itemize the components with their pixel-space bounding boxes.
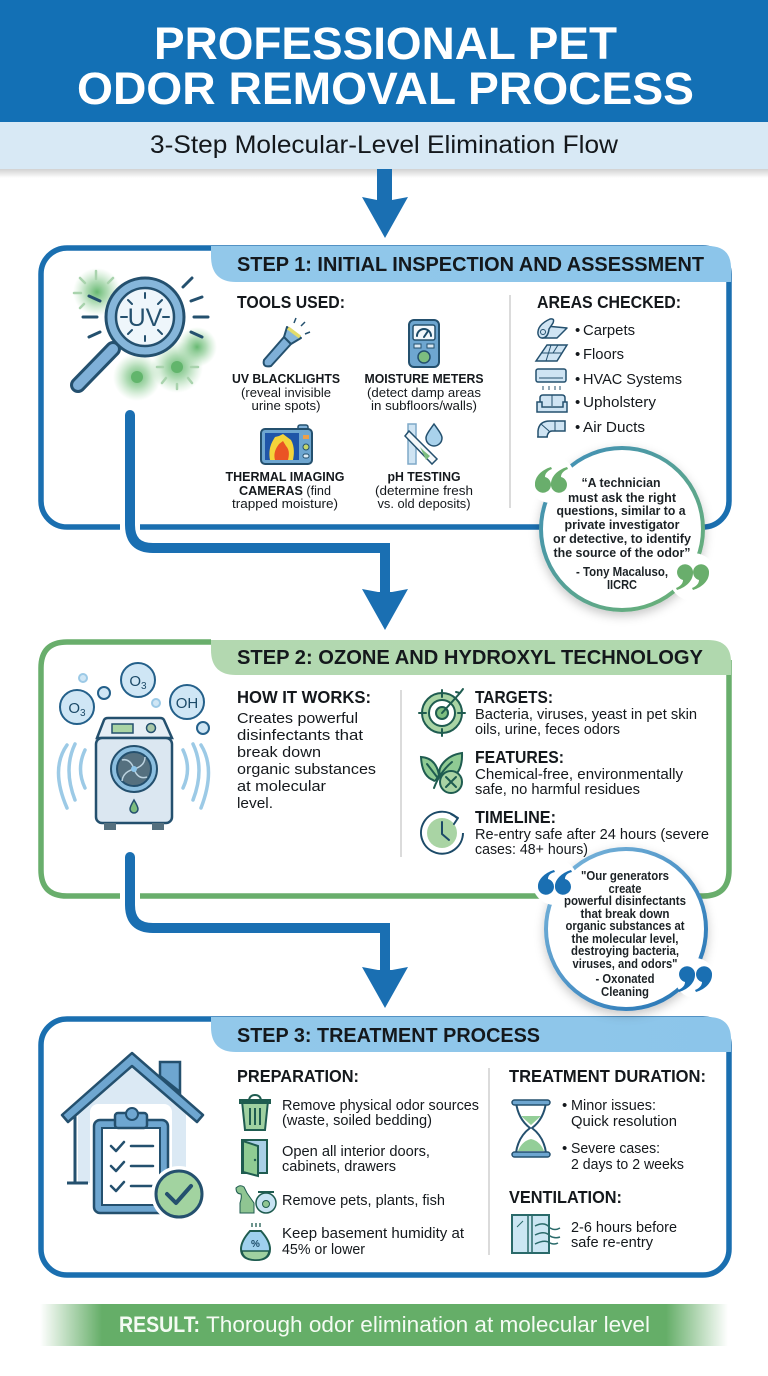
tool: pH testing — [375, 469, 473, 511]
treatment duration: Minor issues: — [571, 1097, 656, 1114]
tool: UV blacklights: (reveal invisible — [241, 385, 331, 400]
panel: step 1 — [41, 246, 731, 527]
tool: UV blacklights — [232, 371, 340, 413]
tool: thermal imaging cameras — [226, 469, 344, 511]
icon: UV magnifier — [73, 268, 217, 401]
icon: humidifier — [241, 1223, 270, 1260]
icon: ozone generator: O — [68, 700, 80, 717]
areas checked: Floors — [583, 346, 624, 363]
areas checked: HVAC Systems — [583, 371, 682, 388]
callout: quote 1: the source of the odor” — [554, 546, 690, 560]
tool: thermal imaging cameras: THERMAL IMAGING — [226, 469, 344, 484]
step 2 heading: STEP 2: OZONE AND HYDROXYL TECHNOLOGY — [237, 647, 704, 669]
subtitle band — [0, 122, 768, 178]
tool: moisture meters: (detect damp areas — [367, 385, 481, 400]
how it works: organic substances — [237, 761, 376, 778]
tool: pH testing: vs. old deposits) — [378, 496, 470, 511]
how it works: disinfectants that — [237, 727, 364, 744]
features — [475, 747, 684, 798]
preparation: Keep basement humidity at — [282, 1225, 465, 1242]
treatment duration: • — [562, 1140, 567, 1157]
icon: leaf with cross — [421, 753, 462, 793]
icon: UV magnifier: UV — [128, 304, 163, 332]
preparation: Remove pets, plants, fish — [282, 1192, 445, 1209]
areas checked: Air Ducts — [583, 419, 645, 436]
callout: quote 1: questions, similar to a — [556, 504, 687, 518]
how it works — [237, 687, 376, 812]
preparation: PREPARATION: — [237, 1066, 359, 1086]
preparation: Remove physical odor sources — [282, 1097, 479, 1114]
tool: moisture meters — [364, 371, 484, 413]
timeline: Re-entry safe after 24 hours (severe — [475, 826, 709, 843]
icon: door — [242, 1140, 267, 1176]
tool: pH testing: pH TESTING — [388, 469, 460, 484]
callout: quote 2: create — [608, 882, 642, 896]
tools used — [226, 292, 484, 511]
tool: UV blacklights: urine spots) — [252, 398, 320, 413]
areas checked: • — [575, 322, 580, 339]
icon: ozone generator — [58, 663, 209, 830]
icon: hourglass — [512, 1100, 550, 1157]
how it works: break down — [237, 744, 321, 761]
tool: moisture meters: in subfloors/walls) — [371, 398, 477, 413]
icon: thermal camera — [261, 425, 312, 464]
icon: clock — [421, 812, 463, 854]
result banner: RESULT: — [119, 1312, 200, 1337]
icon: floor tiles — [536, 345, 567, 361]
icon: air duct — [537, 421, 565, 437]
step 3 heading — [211, 1017, 731, 1052]
header banner — [0, 0, 768, 122]
ventilation: VENTILATION: — [509, 1187, 622, 1207]
how it works: level. — [237, 795, 273, 812]
treatment duration: Quick resolution — [571, 1113, 677, 1130]
preparation: 45% or lower — [282, 1241, 365, 1258]
connector arrow: step 1 to step 2 — [130, 415, 408, 630]
icon: ozone generator: 3 — [141, 681, 147, 692]
icon: ozone generator: O — [129, 673, 141, 690]
tool: thermal imaging cameras: trapped moisture) — [232, 496, 338, 511]
preparation: cabinets, drawers — [282, 1158, 396, 1175]
step 1 heading — [211, 246, 731, 282]
treatment duration: TREATMENT DURATION: — [509, 1066, 706, 1086]
areas checked: • — [575, 394, 580, 411]
ventilation — [509, 1187, 677, 1253]
areas checked: Carpets — [583, 322, 635, 339]
timeline: cases: 48+ hours) — [475, 841, 588, 858]
tool: thermal imaging cameras: CAMERAS (find — [239, 483, 331, 498]
targets: TARGETS: — [475, 687, 553, 707]
icon: house with checklist — [62, 1053, 207, 1222]
callout: quote 1: private investigator — [564, 518, 680, 532]
connector arrow: step 2 to step 3 — [130, 857, 408, 1008]
icon: opening quote mark — [535, 467, 568, 493]
targets: Bacteria, viruses, yeast in pet skin — [475, 706, 697, 723]
title: PROFESSIONAL PET — [154, 18, 617, 69]
icon: ozone generator: 3 — [80, 708, 86, 719]
areas checked: • — [575, 419, 580, 436]
how it works: Creates powerful — [237, 710, 358, 727]
tools used: TOOLS USED: — [237, 292, 345, 312]
callout: quote 1: - Tony Macaluso, — [576, 565, 668, 579]
icon: UV flashlight — [264, 318, 310, 366]
icon: closing quote mark — [678, 966, 712, 992]
how it works: HOW IT WORKS: — [237, 687, 371, 707]
callout: quote 1: must ask the right — [568, 491, 677, 505]
icon: ozone generator: OH — [176, 695, 198, 712]
preparation — [236, 1066, 479, 1260]
treatment duration — [509, 1066, 706, 1173]
panel: step 3 — [41, 1017, 731, 1275]
result banner — [40, 1304, 728, 1346]
callout: quote 1: or detective, to identify — [553, 532, 691, 546]
icon: target — [419, 689, 465, 736]
subtitle band: 3-Step Molecular-Level Elimination Flow — [150, 131, 619, 159]
callout: quote 2: that break down — [580, 907, 670, 921]
icon: humidifier: % — [251, 1239, 260, 1250]
callout: quote 2: viruses, and odors" — [572, 957, 678, 971]
targets — [475, 687, 697, 738]
tool: UV blacklights: UV BLACKLIGHTS — [232, 371, 340, 386]
icon: open window — [512, 1215, 560, 1253]
treatment duration: • — [562, 1097, 567, 1114]
step 3 heading: STEP 3: TREATMENT PROCESS — [237, 1025, 540, 1047]
callout: quote 2: organic substances at — [566, 919, 685, 933]
callout: quote 2: the molecular level, — [572, 932, 678, 946]
callout: quote 2 — [532, 849, 715, 1009]
title — [77, 18, 694, 114]
panel: step 2 — [41, 640, 731, 896]
arrow: header to step 1 — [362, 169, 408, 238]
tool: moisture meters: MOISTURE METERS — [364, 371, 484, 386]
callout: quote 2: - Oxonated — [596, 972, 654, 986]
ventilation: safe re-entry — [571, 1234, 653, 1251]
step 2 heading — [211, 640, 731, 675]
icon: pet and fish bowl — [236, 1186, 276, 1213]
areas checked: Upholstery — [583, 394, 657, 411]
features: Chemical-free, environmentally — [475, 766, 684, 783]
callout: quote 2: destroying bacteria, — [571, 944, 679, 958]
areas checked: AREAS CHECKED: — [537, 292, 681, 312]
callout: quote 1 — [527, 448, 717, 610]
areas checked: • — [575, 346, 580, 363]
treatment duration: Severe cases: — [571, 1140, 660, 1157]
tool: pH testing: (determine fresh — [375, 483, 473, 498]
result banner: Thorough odor elimination at molecular level — [206, 1312, 650, 1337]
icon: opening quote mark — [538, 870, 572, 895]
features: safe, no harmful residues — [475, 781, 640, 798]
title: ODOR REMOVAL PROCESS — [77, 63, 694, 114]
icon: moisture meter — [409, 320, 439, 367]
icon: HVAC — [536, 369, 566, 390]
preparation: (waste, soiled bedding) — [282, 1112, 432, 1129]
preparation: Open all interior doors, — [282, 1143, 430, 1160]
step 1 heading: STEP 1: INITIAL INSPECTION AND ASSESSMENT — [237, 254, 704, 276]
icon: pH test strip — [405, 424, 442, 464]
timeline: TIMELINE: — [475, 807, 556, 827]
callout: quote 2: powerful disinfectants — [564, 894, 686, 908]
targets: oils, urine, feces odors — [475, 721, 620, 738]
features: FEATURES: — [475, 747, 564, 767]
timeline — [475, 807, 709, 858]
treatment duration: 2 days to 2 weeks — [571, 1156, 684, 1173]
icon: closing quote mark — [676, 564, 709, 590]
ventilation: 2-6 hours before — [571, 1219, 677, 1236]
areas checked — [536, 292, 682, 437]
icon: sofa — [537, 395, 567, 412]
icon: carpet — [538, 319, 567, 338]
how it works: at molecular — [237, 778, 326, 795]
icon: trash can — [240, 1095, 270, 1130]
callout: quote 1: IICRC — [607, 578, 637, 592]
callout: quote 2: Cleaning — [601, 985, 649, 999]
areas checked: • — [575, 371, 580, 388]
callout: quote 1: “A technician — [582, 476, 660, 490]
callout: quote 2: "Our generators — [581, 869, 669, 883]
